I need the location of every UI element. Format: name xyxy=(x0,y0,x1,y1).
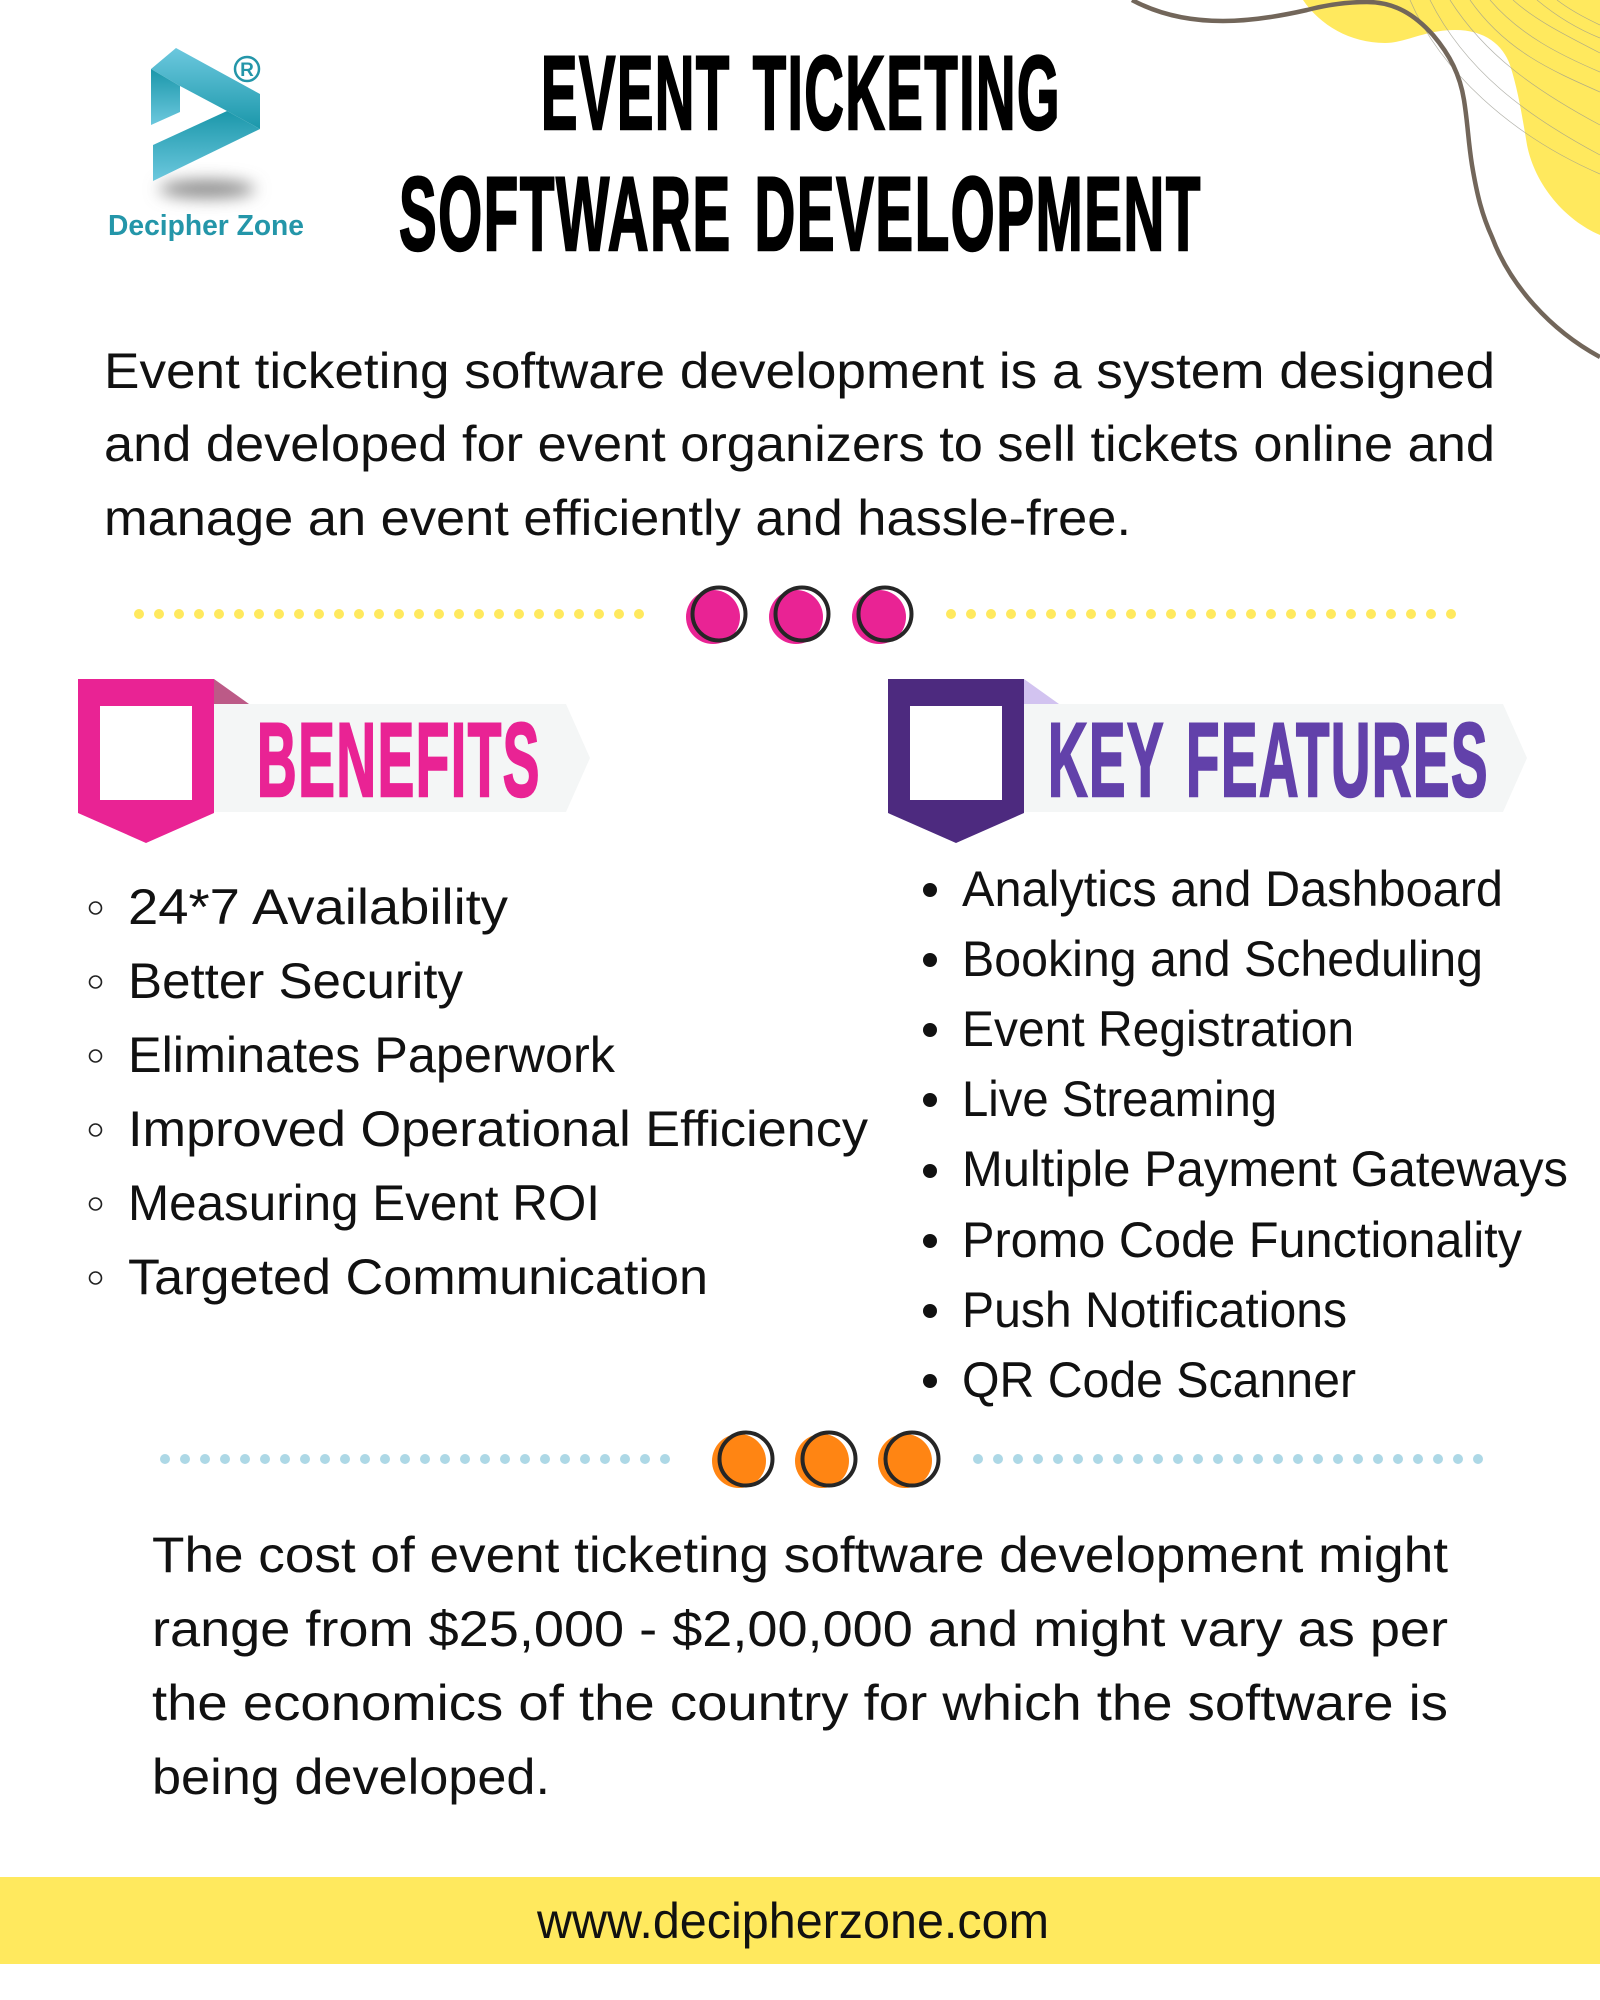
key features list: Event Registration xyxy=(962,1001,1354,1057)
intro paragraph: manage an event efficiently and hassle-free. xyxy=(104,490,1131,546)
cost paragraph xyxy=(152,1527,1448,1805)
key features list: Live Streaming xyxy=(962,1071,1277,1127)
intro paragraph xyxy=(104,343,1495,546)
registered mark: R xyxy=(240,60,254,81)
cost paragraph: being developed. xyxy=(152,1749,550,1805)
title xyxy=(399,35,1202,273)
key features list xyxy=(923,861,1568,1408)
key features list: Push Notifications xyxy=(962,1282,1347,1338)
registered mark xyxy=(235,57,259,81)
benefits list: Improved Operational Efficiency xyxy=(128,1101,868,1157)
key features list: Booking and Scheduling xyxy=(962,931,1483,987)
benefits header badge xyxy=(78,679,590,843)
panel: key features xyxy=(888,679,1568,1408)
cost paragraph: the economics of the country for which the software is xyxy=(152,1675,1448,1731)
key features list: QR Code Scanner xyxy=(962,1352,1356,1408)
footer band xyxy=(0,1877,1600,1964)
cost paragraph: The cost of event ticketing software development might xyxy=(152,1527,1448,1583)
benefits list: Targeted Communication xyxy=(128,1249,708,1305)
benefits list: Eliminates Paperwork xyxy=(128,1027,616,1083)
logo mark xyxy=(151,48,260,181)
logo: Decipher Zone xyxy=(108,48,304,242)
decorative corner blob and curve xyxy=(1132,0,1600,357)
divider: yellow dots and pink circles xyxy=(139,588,1455,644)
key features list: Multiple Payment Gateways xyxy=(962,1141,1568,1197)
key features header badge xyxy=(888,679,1527,843)
key features list: Analytics and Dashboard xyxy=(962,861,1503,917)
key features list: Promo Code Functionality xyxy=(962,1212,1522,1268)
logo wordmark: Decipher Zone xyxy=(108,210,304,242)
benefits header badge: BENEFITS xyxy=(257,702,541,819)
benefits list: Measuring Event ROI xyxy=(128,1175,600,1231)
panel: benefits xyxy=(78,679,868,1305)
logo shadow xyxy=(159,180,255,198)
intro paragraph: Event ticketing software development is a system designed xyxy=(104,343,1495,399)
benefits list xyxy=(90,879,868,1305)
cost paragraph: range from $25,000 - $2,00,000 and might vary as per xyxy=(152,1601,1448,1657)
divider: blue dots and orange circles xyxy=(165,1432,1482,1488)
website url: www.decipherzone.com xyxy=(536,1893,1049,1949)
benefits list: Better Security xyxy=(128,953,463,1009)
title: EVENT TICKETING xyxy=(541,35,1061,152)
intro paragraph: and developed for event organizers to sell tickets online and xyxy=(104,416,1495,472)
benefits list: 24*7 Availability xyxy=(128,879,508,935)
